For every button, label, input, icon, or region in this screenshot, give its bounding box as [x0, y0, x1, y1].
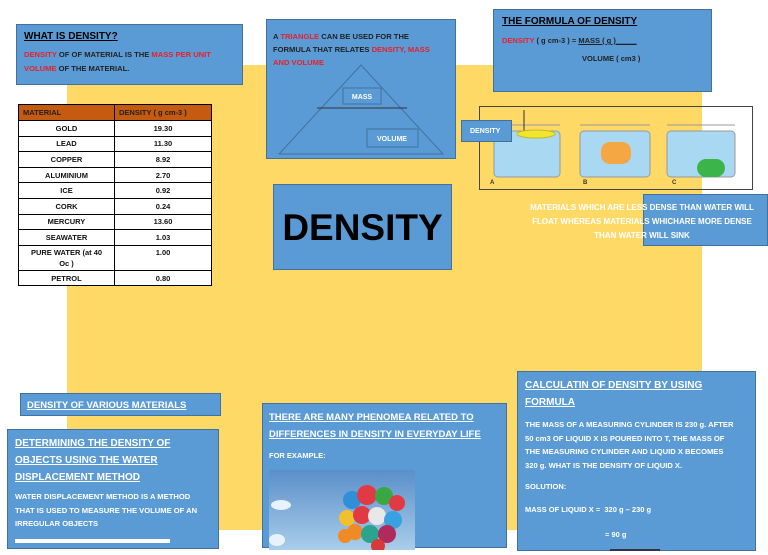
heading: phenomena: THERE ARE MANY PHENOMEA RELATED TO DIFFERENCES IN DENSITY IN EVERYDAY LIFE	[269, 412, 481, 440]
text: problem: 320 g. WHAT IS THE DENSITY OF LIQUID X.	[525, 460, 682, 470]
table: densities of materials: MATERIAL	[23, 108, 61, 117]
text: definition: DENSITY OF OF MATERIAL IS THE MASS PER UNIT	[24, 50, 211, 59]
heading: formula: THE FORMULA OF DENSITY	[502, 16, 637, 27]
text: triangle description: A TRIANGLE CAN BE USED FOR THE	[273, 32, 409, 41]
diagram: triangle: VOLUME	[377, 136, 407, 143]
text: triangle description	[273, 32, 430, 67]
heading: determining density: DETERMINING THE DENSITY OF OBJECTS USING THE WATER DISPLACEMENT METHOD	[15, 438, 170, 483]
text: floating note	[530, 203, 754, 240]
title: DENSITY	[273, 184, 452, 270]
heading: calculation: CALCULATIN OF DENSITY BY USING FORMULA	[525, 380, 702, 408]
diagram: beakers: C	[672, 180, 677, 186]
text: formula: DENSITY ( g cm-3 ) = MASS ( g )_____	[502, 36, 637, 45]
table: densities of materials: 2.70	[156, 171, 170, 180]
text: definition	[24, 50, 211, 73]
text: floating note: THAN WATER WILL SINK	[594, 231, 690, 240]
heading: density of various materials: DENSITY OF VARIOUS MATERIALS	[27, 400, 186, 411]
panel: what is density	[16, 24, 243, 85]
table: densities of materials	[18, 104, 212, 286]
table: densities of materials: LEAD	[56, 139, 77, 148]
label: density	[461, 120, 512, 142]
panel: formula of density	[493, 9, 712, 92]
table: densities of materials: DENSITY ( g cm-3 )	[119, 108, 187, 117]
table: densities of materials: 8.92	[156, 155, 170, 164]
title: DENSITY: DENSITY	[282, 207, 443, 248]
text: problem	[525, 420, 734, 470]
diagram: beakers	[479, 106, 753, 190]
text: method: IRREGULAR OBJECTS	[15, 519, 98, 528]
table: densities of materials: ALUMINIUM	[45, 171, 88, 180]
table: densities of materials: COPPER	[51, 155, 82, 164]
label: density: DENSITY	[470, 128, 500, 135]
panel: calculation example: MASS OF LIQUID X = 320 g – 230 g	[525, 505, 651, 514]
panel: calculation example	[517, 371, 756, 551]
table: densities of materials: GOLD	[56, 124, 77, 133]
table: densities of materials: PURE WATER (at 40	[31, 248, 102, 257]
table: densities of materials: SEAWATER	[46, 233, 87, 242]
text: floating note: FLOAT WHEREAS MATERIALS WHICHARE MORE DENSE	[532, 217, 752, 226]
text: method: WATER DISPLACEMENT METHOD IS A METHOD	[15, 492, 190, 501]
table: densities of materials: 19.30	[154, 124, 172, 133]
table: densities of materials: PETROL	[51, 274, 82, 283]
panel: calculation example: = 90 g	[605, 530, 626, 539]
heading: density of various materials	[20, 393, 221, 416]
panel: formula of density: VOLUME ( cm3 )	[582, 54, 640, 63]
text: problem: THE MASS OF A MEASURING CYLINDER IS 230 g. AFTER	[525, 420, 733, 429]
text: problem: 50 cm3 OF LIQUID X IS POURED INTO T, THE MASS OF	[525, 434, 724, 442]
heading: what is density: WHAT IS DENSITY?	[24, 31, 118, 42]
table: densities of materials: 1.00	[156, 248, 170, 257]
diagram: triangle: MASS	[352, 94, 372, 101]
text: method: THAT IS USED TO MEASURE THE VOLUME OF AN	[15, 506, 197, 514]
table: densities of materials: 1.03	[156, 233, 170, 242]
text: triangle description: FORMULA THAT RELATES DENSITY, MASS	[273, 45, 430, 54]
diagram: beakers: B	[583, 180, 588, 186]
text: problem: THE MEASURING CYLINDER AND LIQUID X BECOMES	[525, 447, 723, 456]
table: densities of materials: 11.30	[154, 139, 172, 148]
table: densities of materials: 0.24	[156, 202, 170, 211]
yellow background	[67, 65, 702, 530]
table: densities of materials: MERCURY	[48, 217, 85, 226]
panel: phenomena	[262, 403, 507, 548]
table: densities of materials: 0.92	[156, 186, 170, 195]
diagram: triangle	[278, 64, 444, 154]
diagram: beakers: A	[490, 180, 495, 186]
text: method	[15, 492, 197, 528]
text: solution: SOLUTION:	[525, 482, 566, 491]
table: densities of materials: CORK	[55, 202, 78, 211]
text: triangle description: AND VOLUME	[273, 58, 324, 67]
text: floating note: MATERIALS WHICH ARE LESS DENSE THAN WATER WILL	[530, 203, 754, 212]
text: for example: FOR EXAMPLE:	[269, 451, 326, 460]
table: densities of materials: 13.60	[154, 217, 172, 226]
image: balloons	[269, 470, 415, 550]
table: densities of materials: Oc )	[59, 259, 74, 268]
panel: triangle formula	[266, 19, 456, 159]
text: definition: VOLUME OF THE MATERIAL.	[24, 64, 129, 73]
panel: sinking/floating note	[643, 194, 768, 246]
table: densities of materials: 0.80	[156, 274, 170, 283]
panel: water displacement	[7, 429, 219, 549]
table: densities of materials: ICE	[60, 186, 73, 195]
